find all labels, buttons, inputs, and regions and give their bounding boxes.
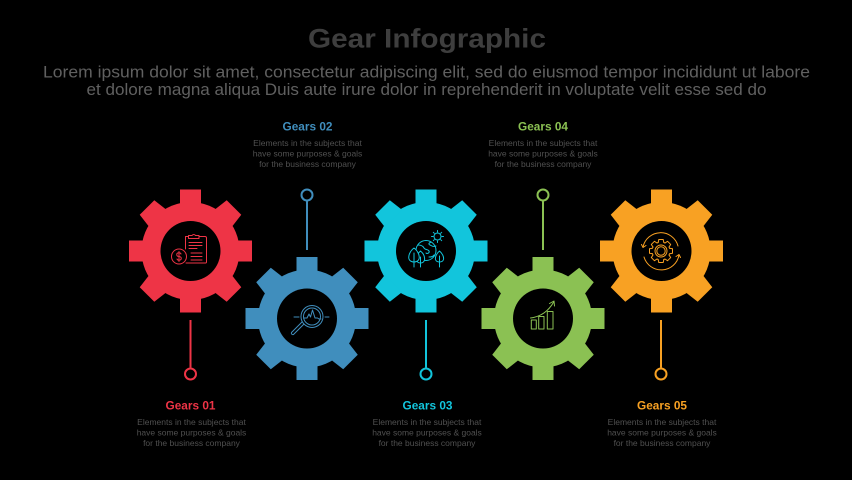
label: gears 05: have some purposes & goals [607,428,717,438]
connector: gear 04 [538,190,548,250]
label: gears 01: Gears 01 [166,400,216,412]
gear 01: red [129,190,252,312]
label: gears 02: have some purposes & goals [253,148,362,158]
icon: globe with sun and trees [409,230,444,267]
icon: rising bar chart [530,301,554,329]
label: gears 05 [607,400,717,448]
gear 04: green [482,257,604,380]
label: gears 02: Gears 02 [282,122,332,134]
label: gears 05: Elements in the subjects that [608,417,717,427]
gear 02: blue [246,257,368,380]
label: gears 03: for the business company [379,438,476,448]
label: gears 04: Elements in the subjects that [489,138,598,148]
connector: gear 03 [420,320,432,380]
connector: gear 05 [656,320,666,380]
title: Gear Infographic [308,24,546,54]
label: gears 02: Elements in the subjects that [253,138,362,148]
label: gears 01: for the business company [143,438,241,448]
label: gears 04: for the business company [495,159,592,169]
label: gears 03 [372,400,482,448]
label: gears 05: for the business company [614,438,711,448]
subtitle text block [43,64,810,99]
icon: gear with rotating arrows [642,233,680,270]
label: gears 05: Gears 05 [637,400,688,412]
label: gears 04: have some purposes & goals [488,148,598,158]
label: gears 02 [253,122,362,169]
label: gears 03: Gears 03 [402,400,452,412]
label: gears 01: have some purposes & goals [137,428,246,438]
label: gears 01: Elements in the subjects that [137,417,246,427]
label: gears 04: Gears 04 [518,122,569,134]
gear 05: orange [600,190,723,312]
subtitle text block: Lorem ipsum dolor sit amet, consectetur adipiscing elit, sed do eiusmod tempor incididunt ut labore [43,64,810,82]
icon: magnifier over chart [291,306,329,335]
label: gears 01 [137,400,246,448]
icon: clipboard with dollar coin [172,234,206,264]
connector: gear 01 [185,320,196,380]
label: gears 03: Elements in the subjects that [373,417,482,427]
label: gears 03: have some purposes & goals [372,428,482,438]
gear 03: cyan [364,190,488,312]
label: gears 04 [488,122,598,169]
subtitle text block: et dolore magna aliqua Duis aute irure dolor in reprehenderit in voluptate velit esse sed do [86,81,766,99]
label: gears 02: for the business company [259,159,357,169]
connector: gear 02 [302,190,312,250]
